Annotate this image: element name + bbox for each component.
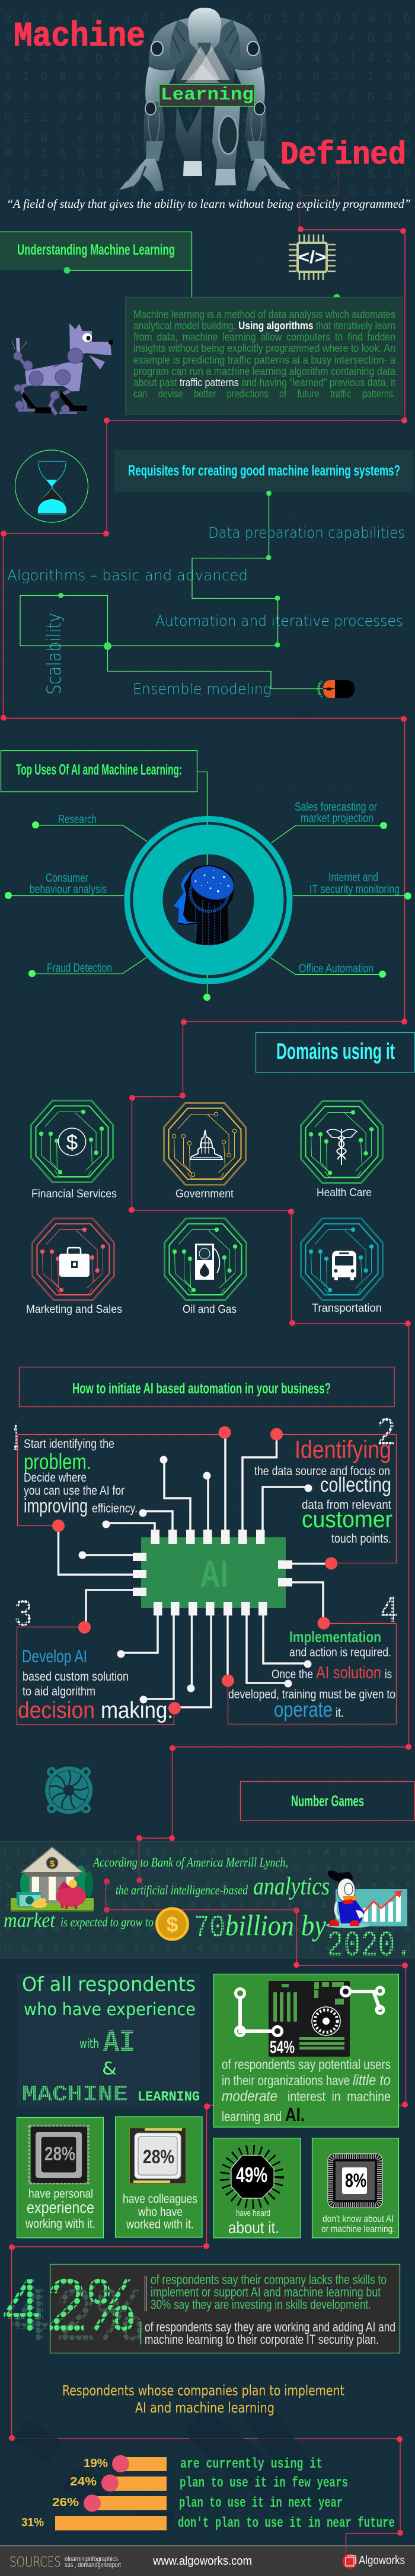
bar chart: plans — [21, 2455, 167, 2530]
panel: 54 percent — [213, 1974, 398, 2127]
domain: Health Care — [301, 1101, 383, 1199]
panel: 28 percent colleagues: worked with it. — [126, 2218, 194, 2231]
background digits: 0 5 2 8 4 8 6 1 0 7 4 2 6 3 7 3 1 4 2 7 3 2 5 — [5, 111, 410, 124]
label: Consumer behaviour analysis — [30, 872, 107, 896]
step 3 text: decision — [18, 1698, 95, 1723]
panel: 28 percent personal: have personal — [28, 2188, 93, 2201]
domain: Marketing and Sales: Marketing and Sales — [26, 1303, 122, 1316]
number 2: 2 — [376, 1412, 396, 1457]
label: Sales forecasting: Sales forecasting or — [295, 801, 377, 814]
background digits: 5 4 2 4 8 0 2 5 9 0 4 3 8 5 1 6 3 4 5 1 4 2 9 — [5, 52, 410, 65]
panel: 49 percent: 49% — [236, 2163, 267, 2187]
icon: cooling fan — [45, 1766, 92, 1814]
heading: Understanding Machine Learning — [0, 232, 340, 301]
text: billion: billion — [225, 1909, 294, 1942]
panel: 54 percent: moderate — [222, 2088, 277, 2105]
panel: 28 percent personal: experience — [27, 2198, 94, 2217]
title: Defined: Defined — [280, 137, 406, 174]
panel: market forecast: ツ ８ ６ ヲ カ ２ Ｂ ８ ４ ６ ９ Ｅ ６ Ｃ Ａ ４ ９ Ｅ ト ラ ホ Ａ チ ラ ト — [4, 1881, 413, 1891]
infographic canvas: 1 — [14, 1415, 18, 1458]
icon: mouse — [318, 680, 355, 698]
chart icon: growth arrow — [336, 1889, 407, 1926]
panel: 8 percent: 8% — [345, 2170, 366, 2191]
heading: Top Uses: Top Uses Of AI and Machine Learning: — [16, 762, 182, 778]
footer — [0, 2545, 415, 2576]
domain: Financial Services: $ — [66, 1131, 78, 1154]
background digits: 2 6 1 8 5 0 4 0 5 1 2 9 8 5 0 2 6 5 0 2 4 1 0 — [5, 12, 410, 25]
footer: SOURCES — [9, 2555, 61, 2570]
icon: gold coin — [155, 1907, 189, 1941]
panel: machine learning explanation: analytical model building. Using algorithms that iteratively learn — [133, 320, 395, 332]
panel: all respondents: LEARNING — [138, 2089, 200, 2105]
panel: market forecast: テ ミ ラ オ ９ ト Ｂ ６ ３ Ｆ Ｃ ０ １ Ｂ ６ ３ Ｆ Ｃ ０ １ ハ ９ Ｍ Ａ Ｐ — [4, 1900, 413, 1910]
step 2 text: collecting — [320, 1473, 391, 1496]
panel: 28 percent personal — [17, 2118, 103, 2238]
icon: AI head — [174, 865, 234, 945]
background digits: 7 8 2 7 0 3 4 6 5 2 1 7 0 4 8 2 4 7 6 0 3 4 1 — [5, 185, 410, 198]
bar: 31%: 31% — [21, 2516, 44, 2529]
panel: 28 percent colleagues: have colleagues — [123, 2192, 197, 2206]
heading: Domains using it — [256, 1033, 414, 1072]
panel: market forecast — [0, 1842, 415, 1958]
panel: all respondents: & — [102, 2058, 117, 2079]
panel: 54 percent: in their organizations have — [222, 2073, 350, 2088]
panel: market forecast: Ｘ ７ カ ネ ト ノ ワ ミ セ ９ ４ ２ ヌ ア Ｓ ３ ５ ル ６ ８ １ ７ ４ ２ ９ Ａ — [4, 1924, 413, 1934]
panel: 54 percent: learning and — [222, 2109, 282, 2124]
panel: 42 percent — [50, 2265, 400, 2353]
bar: 31% — [21, 2516, 167, 2530]
chart: central rings — [127, 819, 289, 981]
requisite: Ensemble modeling: Ensemble modeling — [133, 680, 272, 698]
panel: market forecast: ハ ム ヌ ９ ８ ３ Ｂ リ ７ ２ キ ５ ４ ０ ６ ８ ９ ７ ７ Ａ ４ ８ ２ １ ６ ３ — [4, 1944, 413, 1954]
panel: all respondents: MACHINE — [22, 2082, 128, 2108]
icon: white circuit traces — [236, 1987, 384, 2036]
panel: 28 percent personal: 28% — [44, 2143, 75, 2164]
step 2 text: data from relevant — [302, 1498, 391, 1512]
background digits: 8 7 6 7 6 6 9 0 3 5 4 6 3 1 7 2 5 6 4 3 1 7 8 — [5, 132, 410, 145]
domain: Financial Services: Financial Services — [31, 1188, 117, 1200]
bar: 26%: 26% — [52, 2496, 79, 2509]
domain: Financial Services — [31, 1100, 117, 1200]
step 4 text: it. — [336, 1706, 344, 1720]
chip diagram — [52, 1426, 337, 1714]
step panel outlines — [17, 1434, 396, 1724]
icon: gold coin: $ — [166, 1912, 178, 1936]
route over panel — [104, 1842, 299, 1965]
label: plan to use it in next year: plan to use it in next year — [179, 2495, 343, 2511]
heading: Number Games — [241, 1781, 414, 1820]
panel: 49 percent — [213, 2138, 300, 2238]
background digits: 8 2 3 8 9 2 4 3 6 7 2 9 7 5 0 4 2 8 3 4 8 3 7 — [5, 31, 410, 44]
label: are currently using it: are currently using it — [180, 2456, 323, 2472]
panel: market forecast: / ７ ５ ６ レ Ｂ ヌ ト キ ９ ２ ３ Ｅ Ａ Ｂ ９ Ｓ Ａ ミ Ｅ Ａ Ｂ ク Ｓ ミ ナ — [4, 1848, 413, 1858]
decorative keyboard backdrop — [14, 2395, 336, 2536]
panel: 54 percent: little to — [353, 2072, 391, 2089]
number: 42% shadow: 42% — [9, 2276, 143, 2365]
domain: Transportation — [301, 1219, 383, 1315]
step 2 text: customer — [302, 1507, 392, 1533]
bar: 26% — [52, 2494, 167, 2512]
step 3 text — [18, 1647, 173, 1723]
bar: 24%: 24% — [70, 2475, 97, 2488]
label: Consumer behaviour analysis: behaviour analysis — [30, 883, 107, 896]
text: is expected to grow to: is expected to grow to — [60, 1915, 154, 1929]
background digits: 5 1 0 6 5 5 7 3 7 0 2 8 5 4 2 1 4 8 2 7 1 4 8 — [5, 70, 410, 83]
panel: 28 percent colleagues — [115, 2116, 202, 2237]
icon: code chip: </> — [298, 248, 326, 267]
panel: 8 percent: don't know about AI — [323, 2214, 394, 2224]
step 1 text: Start identifying the — [24, 1437, 114, 1451]
number 3: 3 — [14, 1594, 33, 1637]
text: According to Bank of America: According to Bank of America Merrill Lynch, — [92, 1855, 288, 1870]
step 4 text: Implementation — [289, 1628, 381, 1646]
panel: all respondents — [17, 1973, 200, 2108]
panel: 49 percent: about it. — [228, 2218, 279, 2237]
footer: Algoworks — [359, 2554, 405, 2567]
background digits — [5, 12, 410, 198]
heading: respondents whose companies — [62, 2382, 344, 2416]
footer: sas , demandgenreport — [65, 2561, 122, 2569]
domain: Oil and Gas — [165, 1219, 247, 1316]
number 4: 4 — [379, 1589, 398, 1634]
requisite: Algorithms: Algorithms – basic and advanced — [7, 567, 248, 584]
icon: bank and piggy: $ — [50, 1859, 55, 1869]
panel: all respondents: AI — [103, 2025, 135, 2060]
label: Internet and IT security monitoring — [309, 871, 400, 896]
icon: robot dog — [12, 323, 113, 415]
label: Sales forecasting — [295, 801, 377, 825]
background digits: 0 2 4 1 0 8 9 6 1 3 5 8 2 0 9 1 3 1 0 7 5 1 6 — [5, 168, 410, 181]
domain: Oil and Gas: Oil and Gas — [183, 1303, 237, 1316]
footer: elearninginfographics — [65, 2555, 118, 2563]
title: Learning: Learning — [161, 85, 254, 105]
domain: Government — [164, 1103, 245, 1200]
step 1 text: Decide where — [24, 1471, 87, 1485]
step 2 text — [254, 1435, 392, 1546]
domain: Health Care: Health Care — [317, 1187, 372, 1199]
icon: motherboard — [269, 1981, 350, 2057]
step 1 text: improving — [24, 1495, 88, 1517]
panel: 54 percent: AI. — [285, 2104, 305, 2125]
chip diagram: AI — [200, 1553, 228, 1595]
heading: Top Uses — [1, 751, 197, 792]
domain: Transportation: Transportation — [312, 1302, 382, 1315]
bar: 19% — [84, 2455, 167, 2472]
heading: How to initiate AI — [19, 1367, 394, 1407]
label: Sales forecasting: market projection — [301, 812, 374, 825]
panel: machine learning explanation — [126, 297, 403, 415]
number: 70: 70 — [194, 1910, 225, 1947]
robot illustration — [119, 8, 291, 191]
step 2 text: touch points. — [331, 1532, 391, 1546]
requisite: Scalability: Scalability — [43, 613, 65, 695]
background digits: 5 6 0 0 5 6 3 9 5 7 1 3 8 2 2 4 1 2 8 5 0 4 2 — [5, 91, 410, 104]
icon: bank and piggy — [11, 1847, 94, 1912]
bar: 19%: 19% — [84, 2457, 108, 2470]
heading: Requisites — [114, 450, 413, 492]
step 2 text: Identifying — [295, 1435, 391, 1463]
panel: machine learning explanation: example is predicting traffic patterns at a busy intersection- a — [133, 354, 396, 366]
panel: 8 percent — [312, 2138, 398, 2238]
icon: motherboard: 54% — [270, 2038, 295, 2057]
text: by: by — [301, 1909, 327, 1942]
label: plan to use it in few years: plan to use it in few years — [180, 2475, 348, 2491]
heading: respondents whose companies: Respondents whose companies plan to implement — [62, 2382, 344, 2399]
panel: 28 percent colleagues: who have — [138, 2205, 183, 2219]
text: artificial intelligence: the artificial intelligence-based — [116, 1883, 248, 1897]
heading: Understanding Machine Learning: Understanding Machine Learning — [17, 242, 175, 258]
label: Office Automation: Office Automation — [299, 962, 374, 975]
step 2 text: the data source and focus on — [254, 1464, 390, 1478]
footer: www.algoworks.com — [152, 2555, 252, 2568]
step 3 text: Develop AI — [22, 1647, 87, 1666]
panel: machine learning explanation: about past traffic patterns and having “learned” previous data, it — [133, 377, 395, 388]
icon: hourglass — [15, 450, 88, 522]
step 4 text: is — [385, 1668, 392, 1681]
panel: 28 percent personal: working with it. — [25, 2217, 95, 2231]
label: Internet and IT security monitoring: Internet and — [328, 871, 378, 884]
label: Fraud Detection: Fraud Detection — [47, 962, 112, 975]
label: Consumer behaviour analysis: Consumer — [46, 872, 88, 885]
step 4 text: operate — [274, 1697, 333, 1721]
icon: Scrooge duck — [326, 1871, 370, 1928]
step 4 text — [228, 1628, 395, 1721]
step 1 text — [24, 1437, 138, 1517]
panel: all respondents: Of all respondents — [22, 1973, 196, 1996]
label: Research: Research — [58, 813, 97, 826]
step 3 text: to aid algorithm — [23, 1685, 95, 1698]
step 1 text: problem. — [24, 1450, 91, 1474]
step 3 text: based custom solution — [23, 1670, 129, 1684]
step 4 text: AI solution — [316, 1663, 381, 1682]
requisite: Automation: Automation and iterative processes — [155, 612, 403, 629]
text: market: market — [4, 1909, 56, 1932]
domain: Government: Government — [175, 1188, 234, 1200]
panel: all respondents: with — [79, 2037, 99, 2051]
panel: 28 percent colleagues: 28% — [143, 2146, 174, 2167]
panel: 49 percent: have heard — [236, 2208, 270, 2218]
step 4 text: Once the — [272, 1668, 313, 1681]
panel: 8 percent: or machine learning. — [321, 2224, 395, 2234]
domain: Marketing and Sales — [26, 1219, 122, 1316]
connectors: top uses — [5, 772, 411, 1001]
requisite connectors — [20, 490, 323, 689]
number: 42%: 42% — [0, 2266, 134, 2355]
step 3 text: making. — [101, 1698, 173, 1723]
step 1 text: efficiency. — [92, 1502, 138, 1515]
step 4 text: and action is required. — [289, 1646, 391, 1659]
step 1 text: you can use the AI for — [24, 1484, 124, 1498]
heading: respondents whose companies: AI and machine learning — [135, 2400, 274, 2416]
panel: 54 percent: interest in machine — [288, 2089, 391, 2104]
text: analytics: analytics — [253, 1873, 330, 1900]
title: Machine: Machine — [14, 18, 145, 56]
panel: all respondents: who have experience — [24, 1999, 196, 2019]
background digits: 8 3 1 6 0 2 7 8 4 2 0 5 3 1 0 2 5 1 7 4 1 7 0 — [5, 147, 410, 160]
bar: 24% — [70, 2474, 167, 2492]
heading: Number Games: Number Games — [291, 1792, 364, 1810]
icon: code chip — [289, 235, 336, 280]
panel: market forecast: ト ０ ７ ８ キ ６ ヲ カ ５ ハ ４ ３ ６ Ｃ ８ ホ メ ル ツ Ｄ Ａ Ｃ ８ ホ メ ル — [4, 1864, 413, 1874]
